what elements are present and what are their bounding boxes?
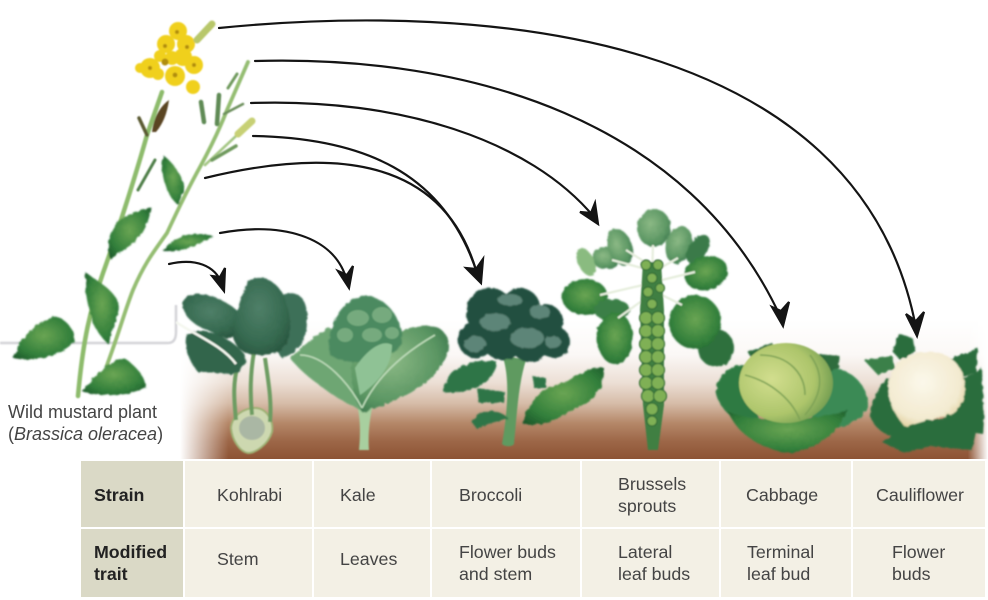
broccoli crown (458, 288, 570, 362)
arrow to broccoli, first branch (253, 136, 478, 276)
cell: Flower buds: Flower (892, 542, 945, 562)
mustard leaves (13, 155, 213, 395)
cauliflower head (888, 352, 965, 427)
cell: Cauliflower: Cauliflower (876, 485, 964, 505)
cell: Terminal leaf bud (721, 529, 851, 597)
wild mustard caption: (Brassica oleracea) (8, 424, 163, 444)
wild mustard caption (8, 402, 163, 444)
cauliflower (864, 334, 984, 453)
cabbage head (739, 343, 833, 423)
cell: Stem (185, 529, 312, 597)
kohlrabi white midrib (176, 322, 236, 364)
kohlrabi bulb and stalks (231, 352, 272, 453)
horizon shadow line (0, 305, 176, 343)
cell: Flower buds and stem: and stem (459, 564, 532, 584)
cell: Flower buds and stem: Flower buds (459, 542, 556, 562)
arrow to cauliflower (219, 20, 924, 336)
strain table (81, 461, 985, 597)
broccoli (443, 288, 604, 446)
cell: Brussels sprouts (582, 461, 719, 527)
cell: Terminal leaf bud: Terminal (747, 542, 814, 562)
wild mustard caption: Wild mustard plant (8, 402, 157, 422)
cell: Broccoli (432, 461, 580, 527)
cell: Lateral leaf buds: Lateral (618, 542, 672, 562)
cell: Flower buds: buds (892, 564, 931, 584)
kale crown folds (337, 307, 399, 342)
cell: Stem: Stem (217, 549, 259, 569)
arrow to cabbage (255, 61, 789, 326)
kale leaf veins and folds (300, 335, 435, 408)
cabbage outer leaves (716, 343, 868, 453)
plant and arrow illustration (0, 19, 987, 459)
broccoli leaves (443, 361, 604, 428)
mustard dark seed pod (152, 100, 169, 132)
broccoli stem (502, 355, 526, 446)
wild mustard plant (13, 22, 252, 396)
cell: Kale: Kale (340, 485, 376, 505)
cell: Terminal leaf bud: leaf bud (747, 564, 810, 584)
arrow to kohlrabi (169, 262, 225, 291)
kohlrabi leaves (183, 277, 307, 374)
header: Strain (81, 461, 183, 527)
cell: Kohlrabi: Kohlrabi (217, 485, 282, 505)
cell: Lateral leaf buds: leaf buds (618, 564, 690, 584)
cell: Flower buds (853, 529, 985, 597)
cell: Brussels sprouts: sprouts (618, 496, 676, 516)
arrow to broccoli, second branch (205, 163, 483, 283)
arrow to brussels sprouts (251, 103, 598, 224)
brussels sprouts (562, 209, 734, 450)
cell: Brussels sprouts: Brussels (618, 474, 686, 494)
cabbage (716, 343, 868, 453)
brussels sprouts stem with buds (640, 260, 666, 450)
cell: Cabbage (721, 461, 851, 527)
cell: Leaves (314, 529, 430, 597)
brussels sprouts leaf stalks (600, 245, 695, 318)
cauliflower leaves (864, 334, 984, 453)
brussels sprouts leaves (562, 209, 734, 367)
mustard stems (78, 62, 251, 396)
cell: Leaves: Leaves (340, 549, 397, 569)
kale leaves (290, 296, 449, 412)
cell: Cabbage: Cabbage (746, 485, 818, 505)
mustard flowers (135, 22, 252, 134)
cell: Flower buds and stem (432, 529, 580, 597)
soil background (182, 351, 987, 459)
cell: Broccoli: Broccoli (459, 485, 522, 505)
header: Modified trait (81, 529, 183, 597)
header: Modified trait: trait (94, 564, 128, 584)
arrows from plant to strains (169, 20, 924, 336)
header: Strain: Strain (94, 485, 144, 505)
cell: Kale (314, 461, 430, 527)
kale (290, 296, 449, 450)
cell: Kohlrabi (185, 461, 312, 527)
arrow to kale (220, 229, 353, 288)
cell: Lateral leaf buds (582, 529, 719, 597)
kohlrabi (176, 277, 307, 453)
cell: Cauliflower (853, 461, 985, 527)
header: Modified trait: Modified (94, 542, 167, 562)
